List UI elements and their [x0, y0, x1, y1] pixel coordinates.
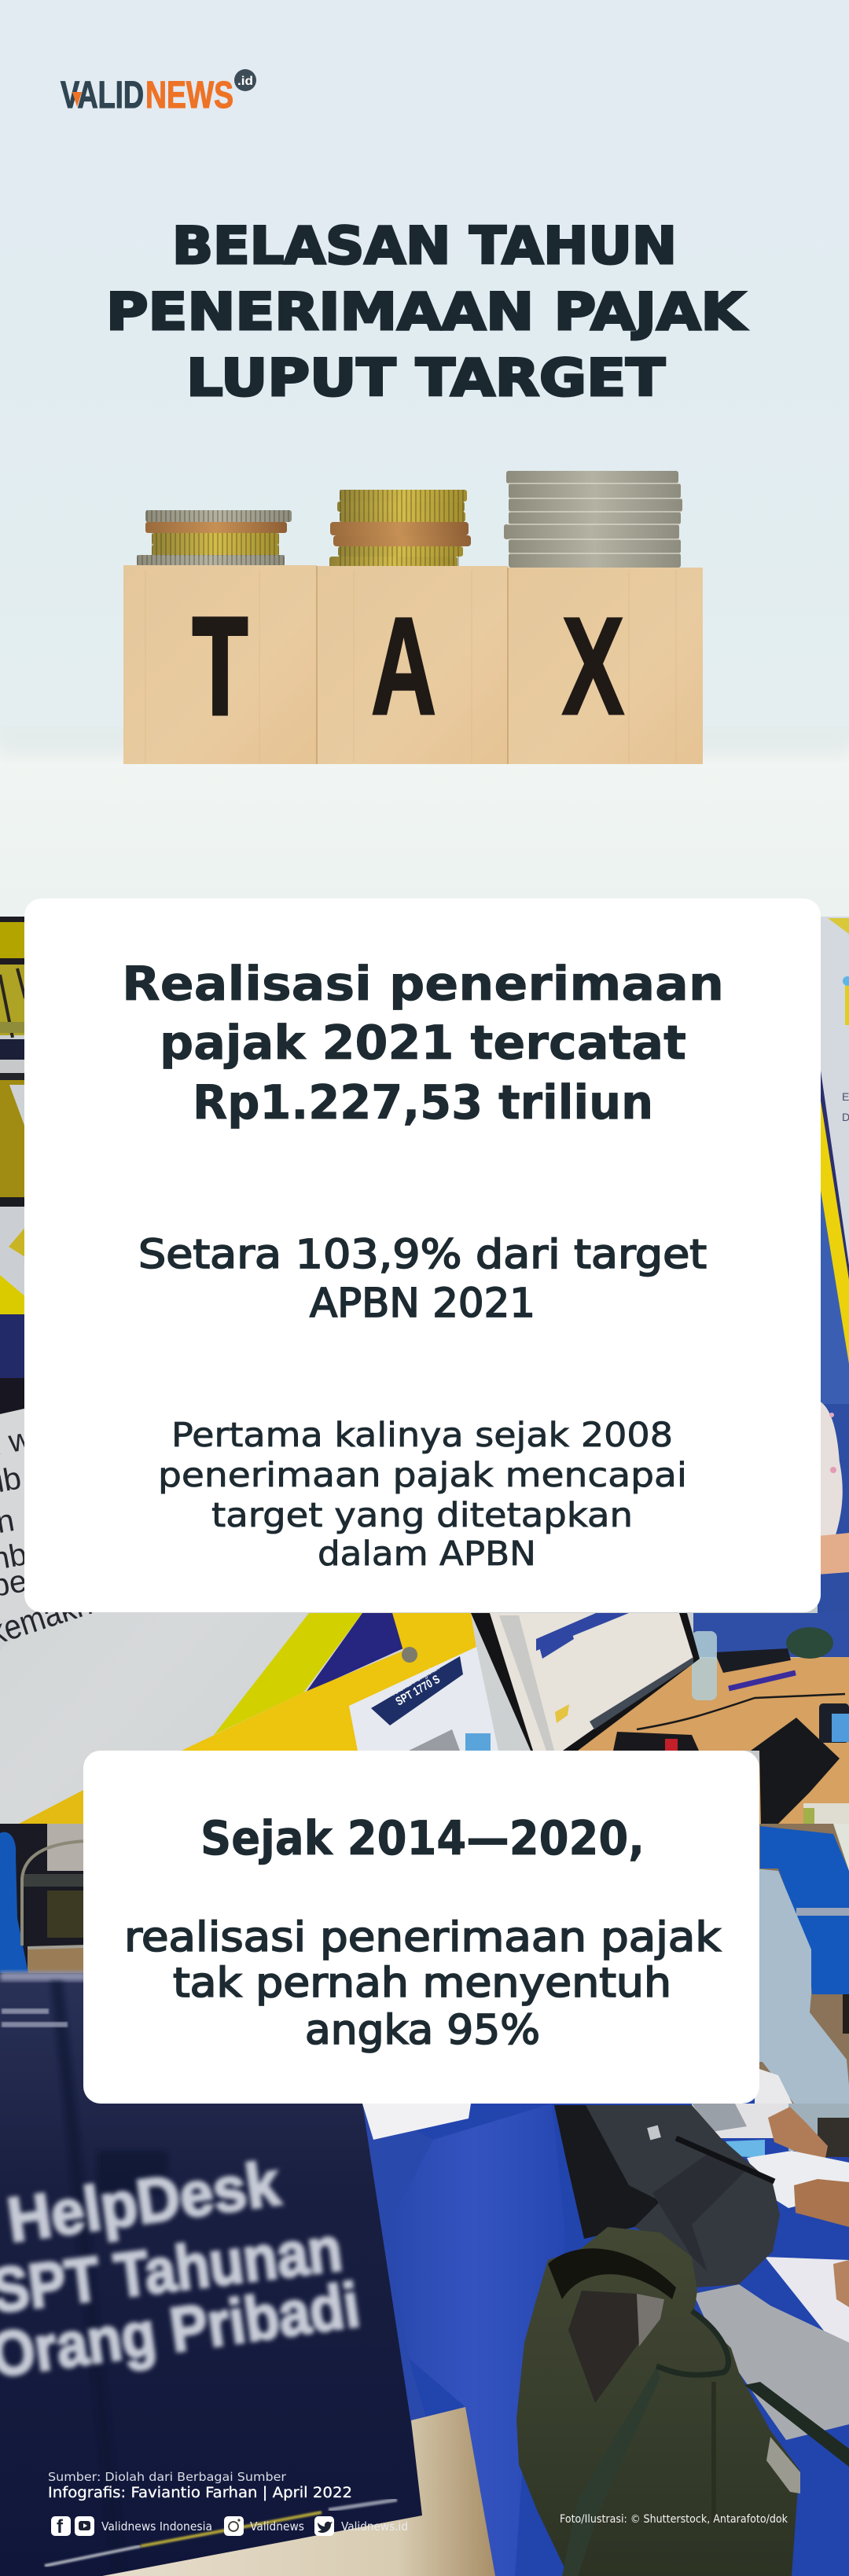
coin stack right — [504, 471, 682, 568]
helpdesk sign board — [0, 1972, 424, 2576]
wall, desk and accessories — [574, 1613, 849, 1824]
source and credit text — [48, 2470, 352, 2501]
panel: realisasi card — [24, 898, 821, 1612]
card heading: Sejak 2014—2020, — [200, 1811, 645, 1866]
card body: target yang ditetapkan — [211, 1496, 633, 1535]
card subheading: APBN 2021 — [310, 1281, 535, 1327]
background: hero backdrop — [0, 0, 849, 920]
card text — [124, 1914, 721, 2054]
block letter T: T — [193, 590, 248, 744]
blurred sign text — [0, 2148, 364, 2390]
illustration: wooden TAX blocks — [123, 565, 703, 764]
logo: Validnews.id — [61, 69, 256, 116]
card text: realisasi penerimaan pajak — [124, 1914, 721, 1961]
acrylic sign: Tutorial Pengisian SPT 1770 S: Tutorial Pengisian — [388, 1663, 441, 1699]
icon: facebook: f — [57, 2516, 64, 2537]
card body — [158, 1416, 687, 1574]
logo: Validnews.id: VALID — [61, 75, 144, 116]
bag strap — [744, 2382, 849, 2467]
logo: Validnews.id: NEWS — [145, 75, 233, 116]
icon: instagram — [224, 2516, 244, 2536]
illustration: coin stacks — [137, 471, 682, 568]
card body: dalam APBN — [318, 1534, 536, 1574]
acrylic sign: Tutorial Pengisian SPT 1770 S: SPT 1770 S — [393, 1673, 443, 1708]
photo: tax office booth — [0, 917, 849, 1824]
acrylic sign: Tutorial Pengisian SPT 1770 S — [349, 1647, 498, 1751]
yellow frame — [19, 1613, 476, 1824]
block letter X: X — [562, 590, 624, 744]
icon: youtube — [75, 2516, 94, 2536]
card headline: Realisasi penerimaan — [122, 957, 724, 1012]
social label: Validnews.id: Validnews.id — [341, 2519, 408, 2534]
card text: angka 95% — [305, 2007, 540, 2054]
icon: twitter — [314, 2516, 334, 2536]
coin stack middle — [329, 490, 471, 568]
papers, calculator and hands — [692, 2104, 849, 2348]
black backpack — [554, 2105, 780, 2288]
card headline — [122, 957, 724, 1130]
card subheading: Setara 103,9% dari target — [138, 1232, 707, 1278]
banner words — [0, 1434, 93, 1641]
title: LUPUT TARGET — [186, 349, 665, 408]
source and credit text: Sumber: Diolah dari Berbagai Sumber — [48, 2470, 287, 2484]
green backpack — [516, 2227, 800, 2576]
card body: penerimaan pajak mencapai — [158, 1456, 687, 1495]
right background: chair, dress and floor — [755, 1824, 849, 2107]
right banner strip — [818, 917, 849, 1616]
photo: helpdesk sign and bags — [0, 1824, 849, 2576]
title: BELASAN TAHUN — [172, 217, 677, 276]
card headline: pajak 2021 tercatat — [160, 1016, 686, 1071]
social label: Validnews Indonesia: Validnews Indonesia — [101, 2519, 212, 2534]
computer monitor — [471, 1613, 700, 1751]
grey jacket — [693, 2284, 849, 2440]
social label: Validnews: Validnews — [250, 2519, 304, 2534]
logo: Validnews.id: .id — [237, 75, 253, 88]
source and credit text: Infografis: Faviantio Farhan | April 2022 — [48, 2485, 352, 2501]
card headline: Rp1.227,53 triliun — [193, 1075, 653, 1130]
sign stand — [102, 2407, 495, 2576]
background chair and floor — [0, 1824, 86, 1981]
white paper behind sign — [362, 2104, 471, 2140]
card text: tak pernah menyentuh — [173, 1960, 671, 2007]
card subheading — [138, 1232, 707, 1327]
card body: Pertama kalinya sejak 2008 — [171, 1416, 673, 1455]
blurred sign text: HelpDesk — [3, 2148, 284, 2255]
panel: sejak 2014-2020 card — [83, 1751, 759, 2104]
title: PENERIMAAN PAJAK — [106, 283, 748, 342]
block letter A: A — [371, 590, 436, 744]
icon: facebook — [51, 2516, 71, 2537]
coin stack left — [137, 510, 292, 566]
left banner strip — [0, 917, 24, 1414]
social media row — [51, 2516, 408, 2537]
title — [106, 217, 748, 408]
blue chair — [393, 2106, 545, 2576]
photo credit: Foto/Ilustrasi: © Shutterstock, Antarafoto/dok — [560, 2513, 788, 2526]
